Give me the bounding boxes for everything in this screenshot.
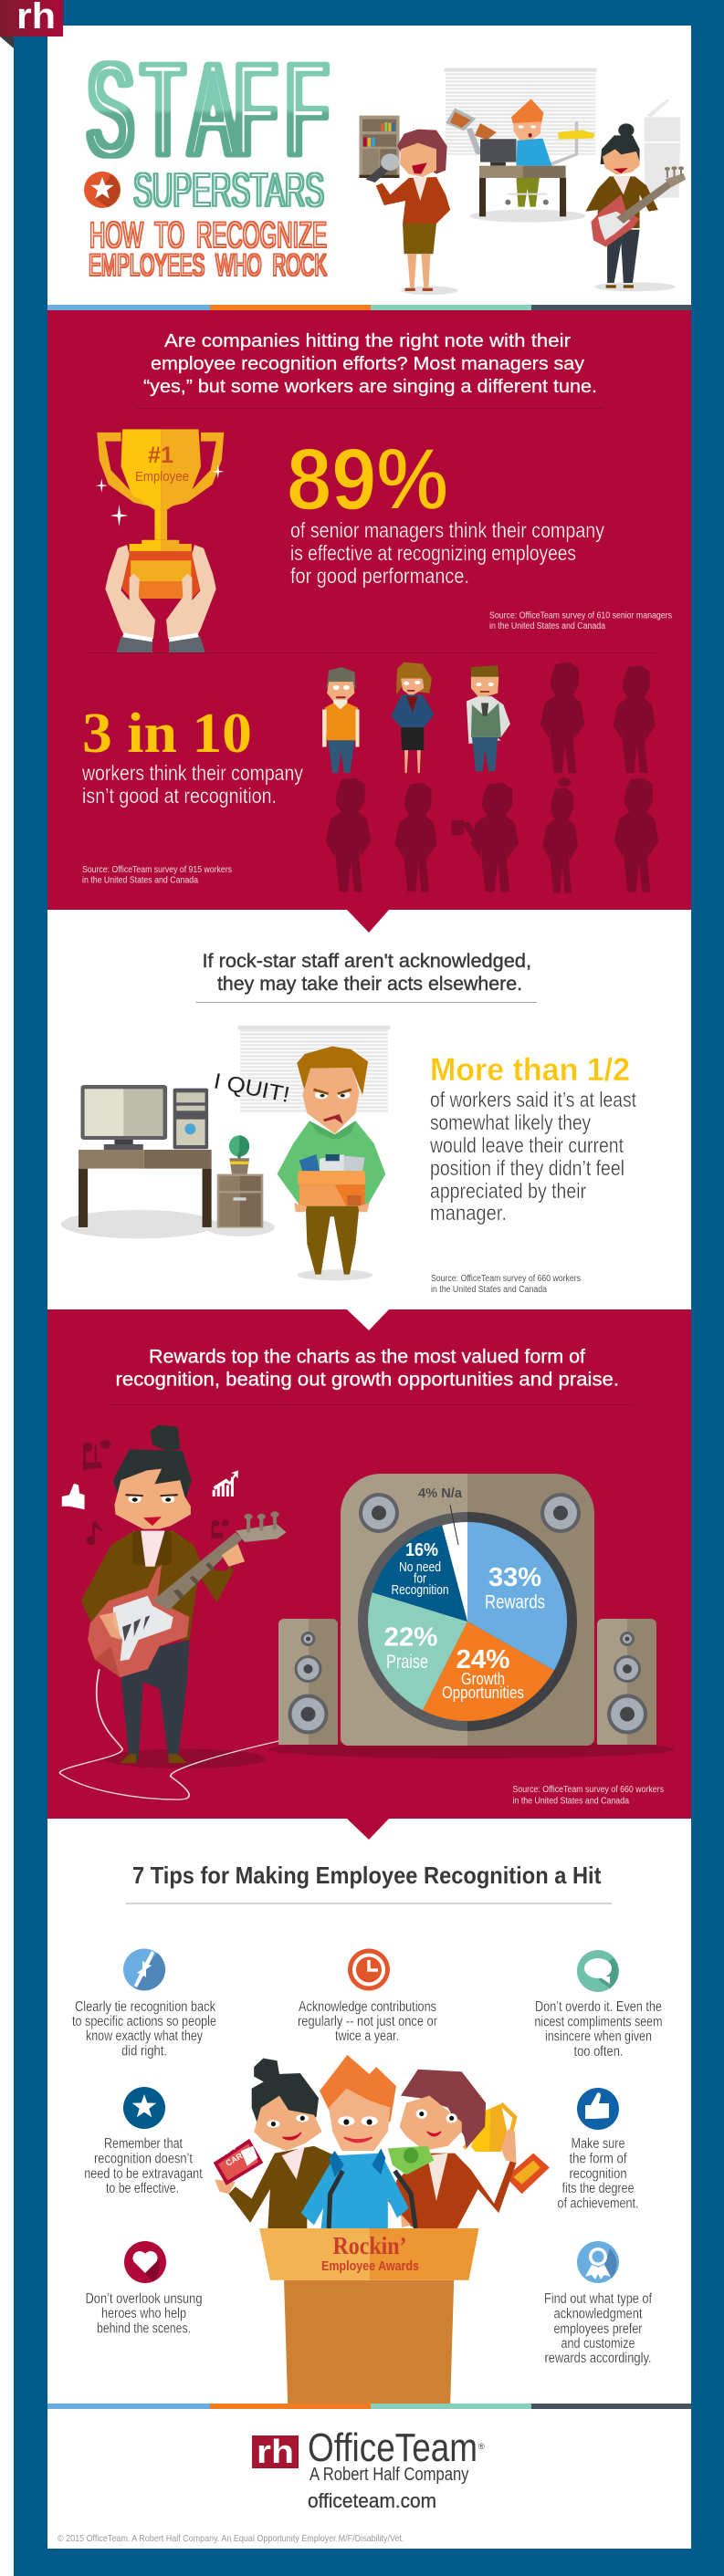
heading: they may take their acts elsewhere.: [217, 974, 522, 995]
tip 1: Clearly tie recognition back: [75, 1999, 215, 2015]
small speaker left: [278, 1619, 338, 1745]
copyright: © 2015 OfficeTeam. A Robert Half Company. An Equal Opportunity Employer M/F/Disability/Vet.: [58, 2533, 404, 2544]
woman with cash: [388, 2070, 516, 2228]
tip 2: [298, 1949, 437, 2044]
tip 2: Acknowledge contributions: [299, 1999, 436, 2015]
icon: star badge: [84, 172, 121, 208]
stat: 3 in 10: workers think their company: [81, 761, 303, 785]
tip 3: Don’t overdo it. Even the: [535, 1999, 662, 2015]
guitarist: [585, 123, 686, 291]
tip 3: insincere when given: [545, 2029, 652, 2044]
tip 5: [557, 2088, 639, 2212]
pie labels: Growth: [461, 1670, 505, 1688]
main speaker cabinet: [341, 1474, 594, 1746]
footer logo block: OfficeTeam: [308, 2425, 477, 2470]
tip 2: twice a year.: [335, 2028, 399, 2044]
illustration: award trio at podium: CARD: [225, 2148, 249, 2168]
source note: [82, 865, 232, 885]
title: Staff: STAFF: [88, 37, 328, 183]
footer logo block: A Robert Half Company: [310, 2465, 469, 2485]
illustration: award trio at podium: Employee Awards: [321, 2259, 419, 2274]
source note: Source: OfficeTeam survey of 660 workers: [431, 1274, 581, 1284]
pie labels: Opportunities: [442, 1684, 524, 1702]
panel: intro stats: [47, 310, 691, 933]
panel: quit: [61, 951, 637, 1330]
source note: Source: OfficeTeam survey of 610 senior managers: [489, 611, 672, 621]
silhouettes of remaining workers: [326, 662, 658, 893]
stat: 89 percent: 89%: [287, 431, 448, 528]
illustration: award trio at podium: Rockin’: [332, 2232, 407, 2259]
icon: speech bubble: [577, 1950, 619, 1992]
colour stripe: [47, 305, 691, 310]
icon: trophy held in hands: [96, 429, 224, 652]
tip 7: acknowledgment: [553, 2307, 643, 2321]
pie labels: Rewards: [485, 1591, 545, 1613]
tip 1: to specific actions so people: [72, 2014, 216, 2029]
illustration: quitting employee: [61, 1026, 390, 1280]
tip 2: regularly -- not just once or: [298, 2014, 437, 2029]
tip 4: to be effective.: [106, 2181, 179, 2196]
footer logo block: ®: [478, 2442, 485, 2451]
worker in blazer: [391, 662, 434, 773]
subtitle: [89, 215, 327, 283]
podium: [259, 2228, 479, 2404]
stat: 3 in 10: [81, 703, 303, 808]
title: Staff: STAFF: [88, 37, 328, 183]
logo tab: [0, 0, 63, 48]
footer logo block: rh: [257, 2433, 294, 2470]
pie labels: Recognition: [391, 1583, 449, 1598]
tip 4: need to be extravagant: [84, 2166, 203, 2182]
icon: star: [123, 2087, 165, 2129]
pie labels: for: [414, 1571, 426, 1586]
tip 7: Find out what type of: [544, 2291, 653, 2307]
illustration: guitarist: [60, 1424, 287, 1799]
water cooler: [645, 99, 680, 198]
subtitle: EMPLOYEES WHO ROCK: [89, 248, 327, 283]
tip 1: [72, 1949, 216, 2059]
computer: [81, 1085, 208, 1150]
panel: header: [84, 37, 686, 295]
subtitle: HOW TO RECOGNIZE: [89, 215, 327, 256]
pie labels: 24%: [456, 1645, 510, 1674]
heading: Rewards top the charts as the most valued form of: [149, 1347, 585, 1367]
drummer at desk: [446, 99, 594, 223]
tip 3: nicest compliments seem: [535, 2015, 663, 2029]
worker in green vest: [467, 665, 510, 771]
cabinet and plant: [217, 1135, 263, 1228]
icon: award ribbon: [577, 2241, 619, 2283]
woman with gift card: [214, 2059, 335, 2228]
speech: I quit: I QUIT!: [212, 1069, 291, 1108]
subtitle: EMPLOYEES WHO ROCK: [89, 248, 327, 283]
tip 1: know exactly what they: [86, 2028, 203, 2044]
footer logo block: [252, 2425, 485, 2512]
illustration: award trio at podium: GIFT: [217, 2142, 238, 2159]
tip 5: fits the degree: [562, 2181, 634, 2196]
intro text: employee recognition efforts? Most managers say: [151, 353, 585, 374]
blinds: [445, 68, 596, 155]
pie labels: [383, 1540, 545, 1702]
intro text: “yes,” but some workers are singing a different tune.: [143, 376, 597, 397]
tip 7: and customize: [561, 2336, 635, 2352]
pie labels: 22%: [383, 1622, 438, 1652]
source note: in the United States and Canada: [489, 621, 605, 631]
footer logo block: officeteam.com: [308, 2489, 436, 2512]
stat: more than half: manager.: [430, 1201, 507, 1225]
stat: more than half: would leave their current: [429, 1133, 624, 1157]
heading: recognition, beating out growth opportunities and praise.: [115, 1369, 619, 1391]
pie labels: 16%: [405, 1540, 438, 1560]
man at microphones: [301, 2055, 415, 2228]
pie slices: [368, 1505, 567, 1721]
pie labels: No need: [399, 1560, 441, 1575]
illustration: office band: [360, 68, 686, 295]
intro text: [143, 330, 597, 397]
stat: more than half: somewhat likely they: [430, 1111, 591, 1134]
tip 5: Make sure: [572, 2136, 624, 2152]
icon: trophy held in hands: Employee: [135, 469, 189, 485]
colour stripe: [47, 2404, 691, 2409]
small speaker right: [597, 1619, 656, 1745]
bookshelf: [360, 116, 400, 178]
panel: rewards: [47, 1309, 691, 1819]
ring: [358, 1512, 577, 1731]
title: Superstars: SUPERSTARS: [133, 164, 324, 217]
singer with microphone: [366, 130, 458, 295]
pie labels: Praise: [386, 1652, 428, 1673]
icon: trophy held in hands: #1: [148, 443, 173, 468]
stat: more than half: More than 1/2: [430, 1052, 630, 1088]
source note: in the United States and Canada: [82, 876, 198, 885]
tip 5: recognition: [570, 2166, 626, 2182]
icon: arrows: [123, 1949, 165, 1991]
heading: 7 Tips for Making Employee Recognition a Hit: [132, 1862, 602, 1889]
stat: more than half: of workers said it’s at least: [430, 1088, 637, 1111]
pie labels: 33%: [488, 1563, 541, 1592]
trophy raised: [464, 2104, 550, 2194]
music notes: [83, 1440, 229, 1545]
title: Superstars: SUPERSTARS: [133, 164, 324, 217]
source note: [513, 1785, 664, 1807]
pictogram: 3 of 10 workers: [322, 662, 658, 893]
man holding box: [277, 1047, 385, 1280]
tip 7: rewards accordingly.: [544, 2351, 652, 2366]
source note: [489, 611, 672, 631]
stat: 89 percent: of senior managers think their company: [290, 518, 604, 542]
panel: tips: [72, 1819, 663, 2404]
intro text: Are companies hitting the right note with their: [164, 330, 571, 351]
tip 3: too often.: [573, 2044, 623, 2060]
tip 7: employees prefer: [553, 2321, 643, 2337]
tip 3: [535, 1950, 663, 2060]
tip 6: heroes who help: [101, 2306, 186, 2321]
heading: If rock-star staff aren't acknowledged,: [203, 951, 531, 972]
stat: more than half: position if they didn’t feel: [430, 1156, 624, 1180]
worker in orange vest: [322, 667, 360, 773]
tip 5: the form of: [570, 2152, 627, 2166]
desk: [61, 1150, 275, 1238]
stat: 3 in 10: isn’t good at recognition.: [82, 784, 277, 808]
subtitle: HOW TO RECOGNIZE: [89, 215, 327, 256]
stat: 89 percent: for good performance.: [290, 564, 469, 588]
icon: thumbs up: [62, 1484, 85, 1509]
chart: speaker pie chart: [268, 1474, 674, 1758]
title: Superstars: [133, 164, 324, 217]
tip 4: [84, 2087, 203, 2196]
source note: Source: OfficeTeam survey of 915 workers: [82, 865, 232, 875]
chart: speaker pie chart: 4% N/a: [418, 1486, 463, 1501]
tip 5: of achievement.: [557, 2195, 639, 2212]
stat: more than half: [429, 1052, 637, 1225]
tip 6: behind the scenes.: [97, 2321, 191, 2336]
source note: in the United States and Canada: [513, 1796, 629, 1807]
icon: clock: [348, 1949, 390, 1991]
icon: chart: [213, 1470, 238, 1497]
tip 4: recognition doesn’t: [94, 2152, 194, 2166]
icon: thumbs up: [577, 2088, 619, 2130]
heading: [203, 951, 531, 995]
stat: 89 percent: [287, 431, 604, 588]
source note: [431, 1274, 581, 1295]
stat: 89 percent: is effective at recognizing employees: [290, 541, 576, 565]
tip 1: did right.: [121, 2044, 167, 2059]
stat: 3 in 10: 3 in 10: [82, 703, 252, 765]
stat: more than half: appreciated by their: [430, 1179, 586, 1203]
icon: heart: [124, 2241, 166, 2283]
source note: Source: OfficeTeam survey of 660 workers: [513, 1785, 664, 1795]
illustration: award trio at podium: [214, 2055, 550, 2404]
tip 4: Remember that: [104, 2136, 184, 2152]
tip 6: Don’t overlook unsung: [86, 2291, 203, 2307]
cable: [60, 1669, 279, 1799]
blinds: [237, 1026, 390, 1113]
tip 6: [86, 2241, 203, 2336]
tip 7: [544, 2241, 653, 2366]
source note: in the United States and Canada: [431, 1285, 547, 1295]
heading: [115, 1347, 619, 1391]
